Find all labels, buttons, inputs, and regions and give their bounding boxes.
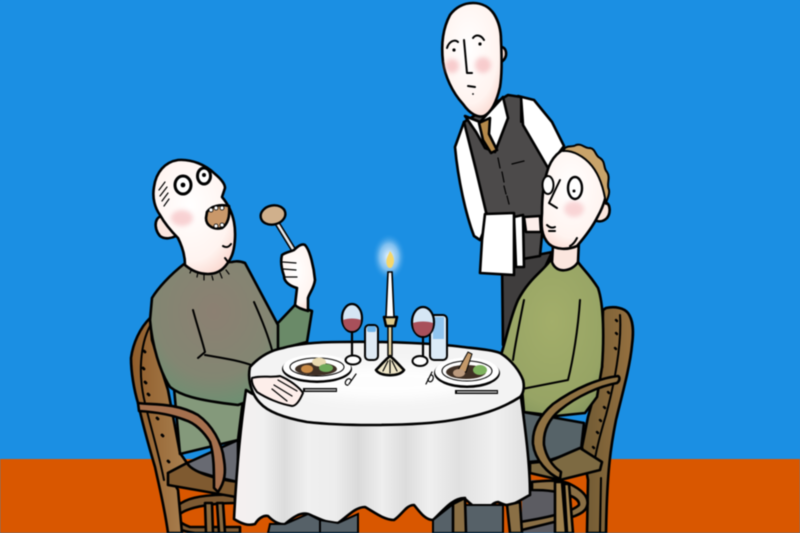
right man nose and mouth — [547, 180, 577, 246]
waiter cheeks — [445, 57, 491, 73]
table-side chair leg right of right man — [507, 502, 522, 533]
table — [234, 233, 530, 525]
right man cheek — [564, 201, 584, 217]
right man sweater — [501, 258, 603, 416]
left water glass — [365, 325, 378, 360]
waiter right shirt sleeve — [518, 96, 564, 170]
trousers under table — [268, 498, 522, 533]
right chair lower ring — [520, 481, 588, 530]
waiter — [442, 3, 564, 345]
hand — [281, 244, 315, 311]
left man hand on table — [252, 376, 303, 406]
right man hair — [563, 145, 609, 204]
left man open mouth — [206, 205, 229, 229]
left man face and neck — [153, 160, 235, 274]
left chair inner legs — [205, 503, 225, 533]
left chair back — [131, 318, 187, 533]
right plate — [434, 352, 500, 388]
waiter head — [442, 3, 502, 116]
right man sweater detail lines — [522, 300, 580, 389]
tablecloth skirt — [234, 390, 530, 525]
left man eyes — [175, 168, 210, 194]
fork — [277, 223, 293, 249]
left man cheek — [171, 210, 193, 226]
grey floor shadow behind right chair — [522, 480, 556, 533]
waiter hand — [524, 216, 541, 232]
left plate — [282, 354, 352, 383]
waiter trousers — [502, 252, 552, 345]
small spoon left — [345, 374, 356, 385]
waiter napkin — [480, 213, 524, 275]
left man trousers — [187, 440, 238, 482]
right man trousers — [523, 412, 584, 462]
waiter shirt collar and tie — [465, 97, 508, 153]
left man neckline ticks — [190, 268, 229, 280]
waiter face — [447, 36, 484, 95]
right chair inner legs — [555, 482, 573, 533]
candle — [386, 272, 394, 317]
right man eyes — [542, 176, 582, 199]
left chair — [131, 318, 240, 533]
right man face — [542, 147, 607, 249]
left chair arm — [138, 403, 225, 492]
right water glass — [430, 315, 447, 360]
left chair seat — [168, 463, 238, 497]
left man sweater — [150, 261, 278, 405]
right man head — [542, 145, 610, 249]
mushroom on fork — [259, 203, 287, 227]
right chair seat — [530, 448, 602, 480]
candlestick — [376, 317, 404, 375]
tablecloth top — [249, 342, 524, 425]
left man ear — [156, 216, 176, 238]
waiter vest — [464, 95, 548, 262]
left man sleeve on right arm — [276, 305, 312, 350]
right man body — [501, 240, 619, 480]
background: orange floor — [0, 459, 800, 533]
left man sweater folds — [193, 302, 272, 366]
right chair back — [582, 307, 633, 533]
left man temple hair ticks — [159, 182, 169, 206]
left chair lower ring — [169, 495, 240, 533]
right cutlery — [455, 390, 498, 394]
left cutlery — [303, 388, 337, 392]
right man legs — [433, 505, 503, 533]
left wine glass — [342, 304, 362, 364]
table-side chair leg left of right man — [453, 498, 466, 533]
waiter left shirt sleeve — [455, 122, 492, 240]
left man raised hand with fork — [259, 203, 315, 311]
left man legs — [268, 514, 358, 533]
right man ear — [594, 202, 610, 221]
left man lower sweater — [174, 388, 243, 454]
left man body — [138, 261, 312, 497]
right wine glass — [412, 307, 434, 366]
right chair arm — [533, 376, 619, 479]
right chair — [520, 307, 633, 533]
waiter ear — [499, 47, 506, 62]
right man neck — [552, 240, 579, 270]
left man head — [153, 160, 235, 274]
small spoon right — [426, 372, 433, 384]
left man chin smile — [223, 244, 231, 262]
candle glow — [372, 233, 406, 281]
candle flame — [386, 251, 394, 268]
